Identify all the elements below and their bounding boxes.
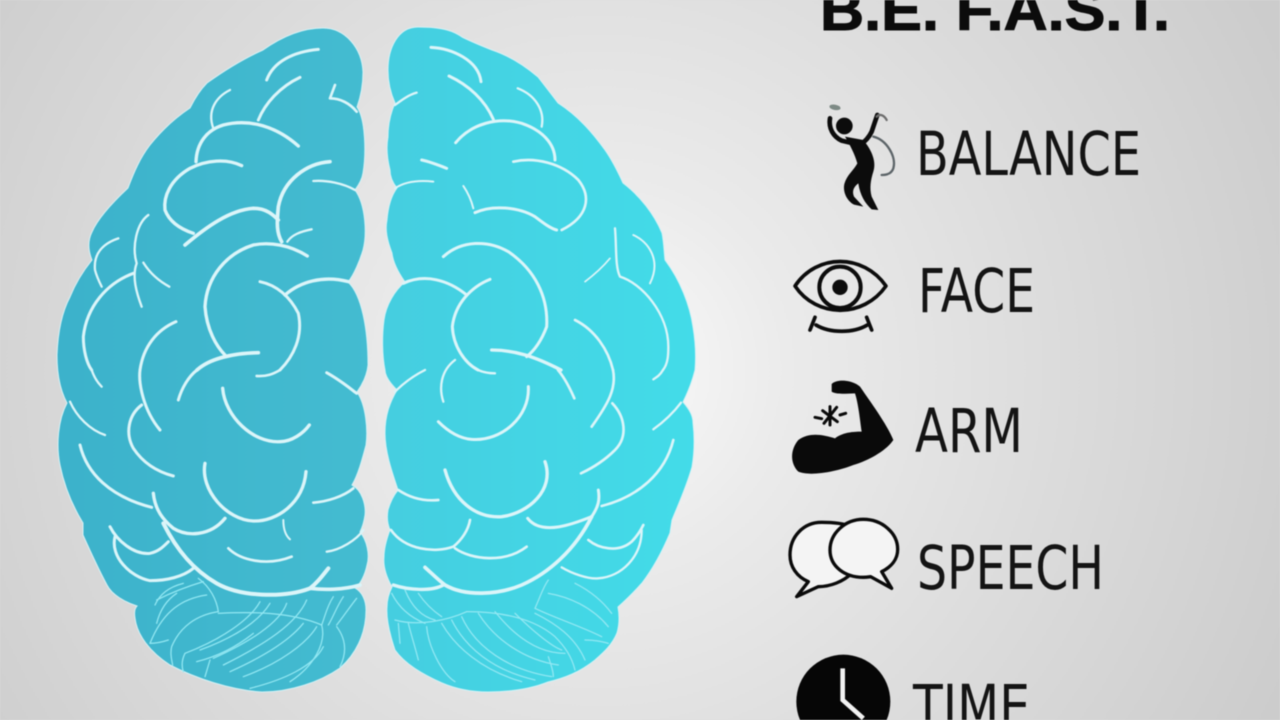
icon: eye and smile [795, 261, 886, 331]
icon: flexed arm [792, 381, 893, 474]
left hemisphere [57, 28, 368, 692]
brain illustration [57, 27, 696, 692]
label: balance: BALANCE [916, 119, 1141, 190]
item: time [796, 655, 1030, 720]
icon: speech bubbles [790, 519, 898, 597]
icon: off-balance figure [829, 104, 894, 210]
label: face: FACE [918, 256, 1035, 327]
icon: clock [796, 655, 890, 720]
item: balance [829, 104, 1141, 210]
label: speech: SPEECH [917, 533, 1104, 604]
label: arm: ARM [915, 396, 1023, 467]
item: arm [792, 381, 1023, 474]
item: face [795, 256, 1035, 331]
right hemisphere [383, 27, 696, 692]
item: speech [790, 519, 1104, 604]
